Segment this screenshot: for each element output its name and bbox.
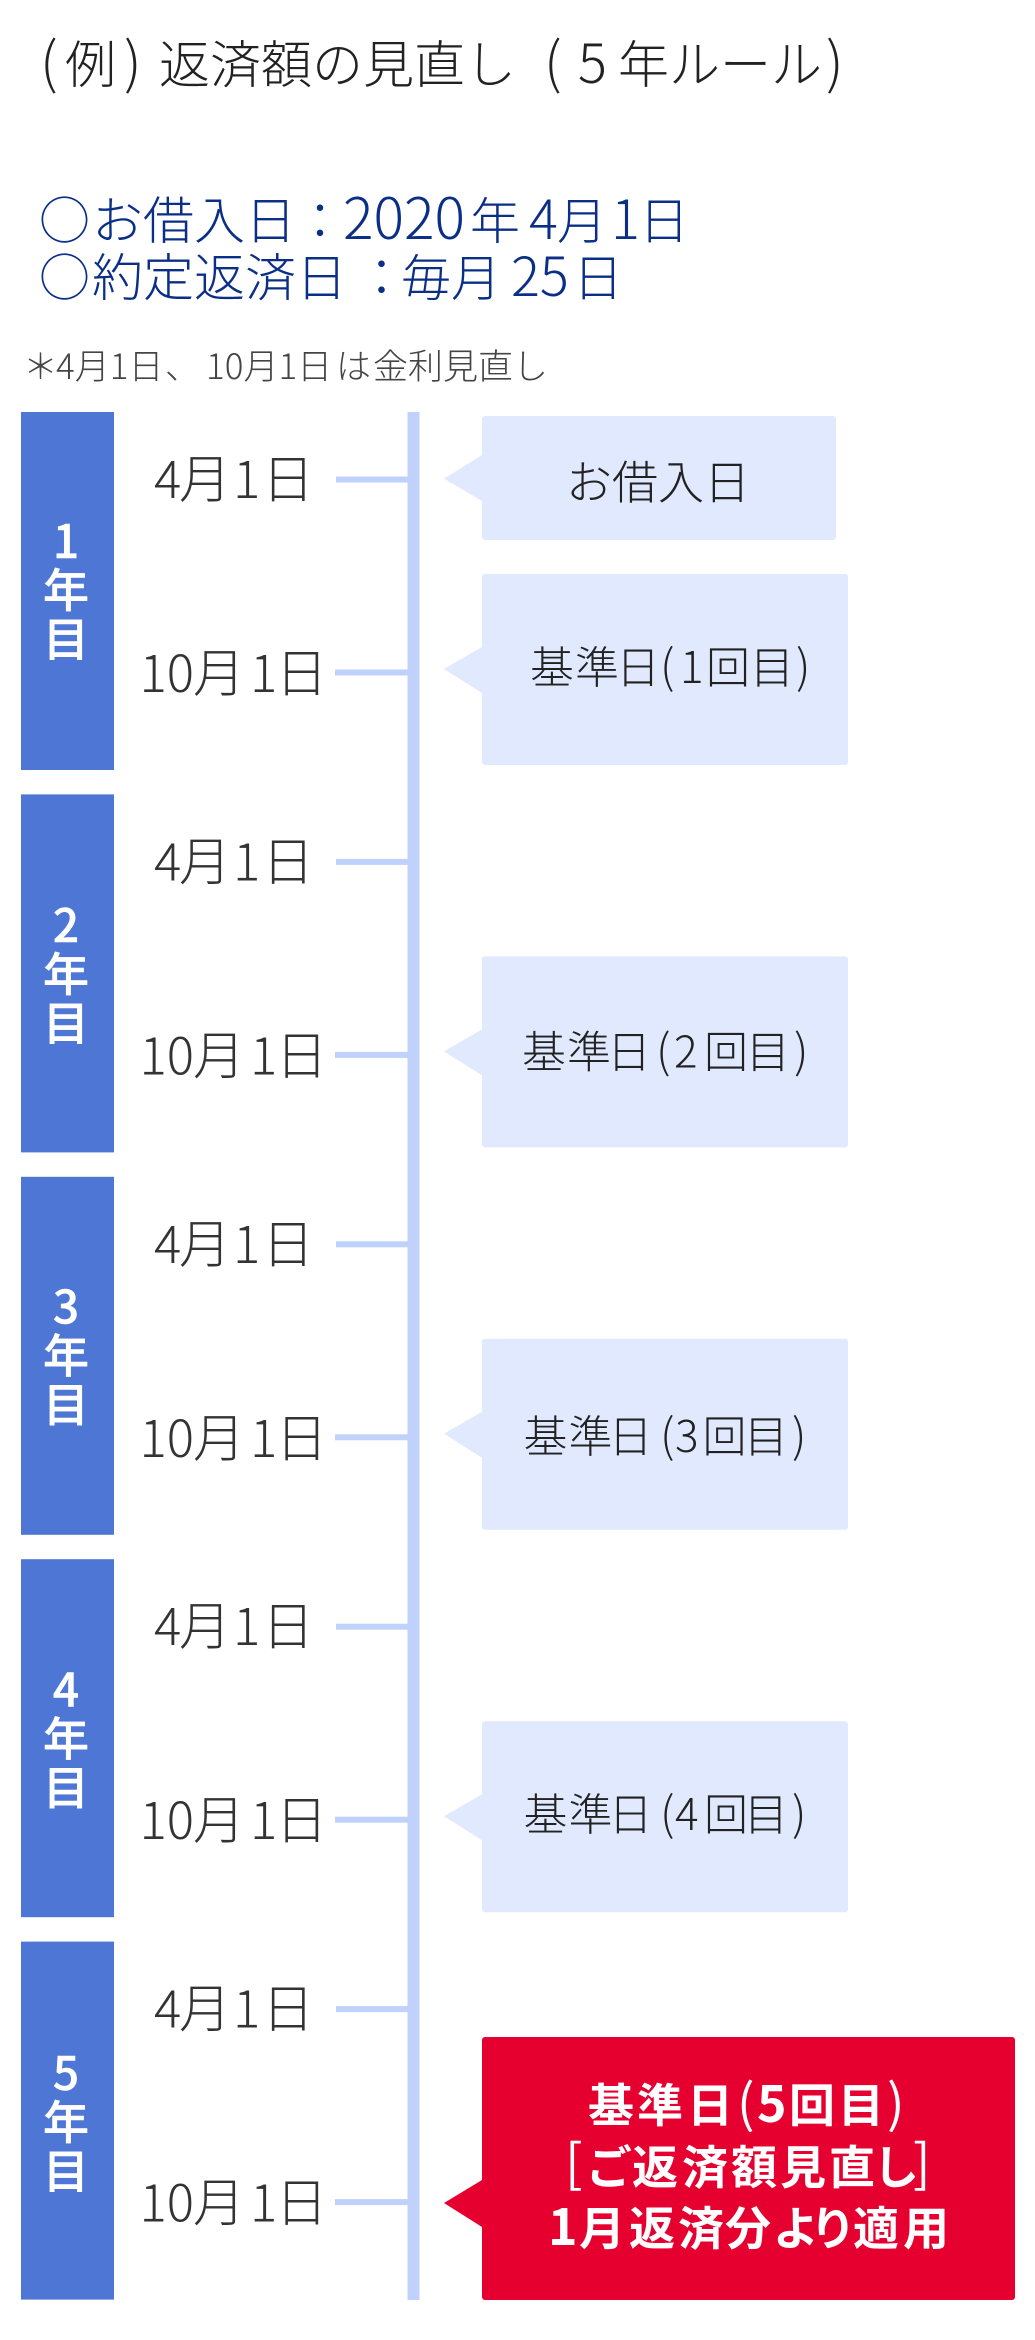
title: 5 bbox=[578, 20, 607, 99]
year 5 October date and tick: 10 bbox=[140, 2163, 194, 2237]
year 1 October date and tick bbox=[140, 632, 408, 707]
year 1 block: 目 bbox=[43, 604, 89, 670]
year 2 October date and tick: 日 bbox=[276, 1014, 328, 1089]
year 2 October date and tick bbox=[140, 1014, 408, 1089]
year 2 April date and tick: 4 bbox=[154, 821, 181, 895]
year 3 block: 3 bbox=[53, 1272, 79, 1338]
year 4 April date and tick bbox=[154, 1585, 408, 1660]
year 3 April date and tick: 月 bbox=[179, 1203, 231, 1278]
year 3 April date and tick: 4 bbox=[154, 1204, 181, 1278]
year 5 April date and tick bbox=[154, 1968, 408, 2043]
year 2 April date and tick: 1 bbox=[233, 821, 260, 895]
year 1 April date and tick: 4 bbox=[154, 439, 181, 513]
year 5 October date and tick: 1 bbox=[250, 2163, 277, 2237]
year 4 April date and tick: 4 bbox=[154, 1586, 181, 1660]
year 2 block: 2 bbox=[53, 890, 79, 956]
callout: reference date 3: 基準日 bbox=[524, 1401, 652, 1465]
year 3 block bbox=[21, 1177, 114, 1535]
year 5 April date and tick: 日 bbox=[262, 1968, 314, 2043]
year 3 April date and tick bbox=[154, 1203, 408, 1278]
note: 4月1日 bbox=[56, 339, 163, 390]
callout: reference date 4: 回目 bbox=[704, 1779, 788, 1843]
note: 、 bbox=[165, 339, 200, 390]
year 2 block: 年 bbox=[43, 939, 89, 1005]
year 3 October date and tick: 10 bbox=[140, 1398, 194, 1472]
year 5 block bbox=[21, 1942, 114, 2300]
year 2 April date and tick: 月 bbox=[179, 820, 231, 895]
year 2 October date and tick: 10 bbox=[140, 1015, 194, 1089]
year 4 block: 4 bbox=[53, 1655, 79, 1721]
year 4 April date and tick: 月 bbox=[179, 1585, 231, 1660]
note: ＊ bbox=[23, 339, 58, 390]
callout: reference date 3: ) bbox=[792, 1400, 806, 1466]
year 4 block: 年 bbox=[43, 1704, 89, 1770]
callout: reference date 5, repayment review: ( bbox=[737, 2062, 755, 2137]
title: 年ルール bbox=[618, 24, 822, 98]
year 4 block: 目 bbox=[43, 1753, 89, 1819]
year 5 April date and tick: 1 bbox=[233, 1969, 260, 2043]
payment date line: 25 bbox=[511, 233, 569, 312]
year 3 October date and tick: 月 bbox=[193, 1397, 245, 1472]
year 1 October date and tick: 10 bbox=[140, 633, 194, 707]
callout: reference date 5, repayment review: [ bbox=[565, 2122, 583, 2197]
title: ) bbox=[826, 19, 844, 100]
year 1 April date and tick: 1 bbox=[233, 439, 260, 513]
callout: reference date 5, repayment review: ) bbox=[887, 2062, 905, 2137]
year 5 block: 目 bbox=[43, 2136, 89, 2202]
title: ) bbox=[124, 19, 142, 100]
callout: reference date 5, repayment review: ] bbox=[913, 2122, 931, 2197]
loan date line: 年 bbox=[470, 182, 520, 254]
loan date line: お借入日 bbox=[92, 180, 296, 254]
payment date line: 日 bbox=[573, 239, 623, 311]
title: 例 bbox=[65, 24, 116, 98]
payment date line: ： bbox=[356, 237, 407, 311]
year 4 block bbox=[21, 1559, 114, 1917]
year 4 October date and tick: 10 bbox=[140, 1780, 194, 1854]
year 3 October date and tick bbox=[140, 1397, 408, 1472]
callout: reference date 3 bbox=[444, 1339, 848, 1530]
loan date line: 月 bbox=[557, 182, 607, 254]
callout: reference date 1: 回目 bbox=[706, 632, 794, 696]
note: 10月1日 bbox=[206, 339, 332, 390]
callout: reference date 4: 4 bbox=[675, 1779, 699, 1843]
year 2 April date and tick: 日 bbox=[262, 820, 314, 895]
year 3 April date and tick: 1 bbox=[233, 1204, 260, 1278]
note: 金利見直し bbox=[373, 339, 548, 390]
year 1 October date and tick: 月 bbox=[193, 632, 245, 707]
year 2 block: 目 bbox=[43, 988, 89, 1054]
year 3 block: 目 bbox=[43, 1370, 89, 1436]
callout: reference date 3: 3 bbox=[675, 1401, 699, 1465]
callout: reference date 4 bbox=[444, 1721, 848, 1912]
year 4 April date and tick: 日 bbox=[262, 1585, 314, 1660]
callout: reference date 2: 回目 bbox=[704, 1016, 790, 1080]
year 4 October date and tick: 月 bbox=[193, 1779, 245, 1854]
callout: reference date 2 bbox=[444, 956, 848, 1147]
callout: reference date 5, repayment review bbox=[444, 2037, 1015, 2300]
callout: reference date 4: 基準日 bbox=[524, 1779, 652, 1843]
callout: reference date 4: ) bbox=[792, 1778, 806, 1844]
callout: reference date 2: ( bbox=[656, 1016, 670, 1082]
callout: loan date bbox=[444, 416, 836, 540]
callout: reference date 5, repayment review: ご返済額見直し bbox=[586, 2132, 919, 2198]
year 5 block: 5 bbox=[53, 2038, 79, 2104]
year 1 October date and tick: 1 bbox=[250, 633, 277, 707]
year 1 block bbox=[21, 412, 114, 770]
loan date line: ○ bbox=[39, 180, 90, 254]
payment date line: ○ bbox=[39, 237, 90, 311]
year 2 October date and tick: 1 bbox=[250, 1015, 277, 1089]
payment date line: 約定返済日 bbox=[92, 237, 347, 311]
year 5 April date and tick: 4 bbox=[154, 1969, 181, 2043]
note: は bbox=[336, 339, 371, 390]
year 3 block: 年 bbox=[43, 1320, 89, 1386]
callout: reference date 5, repayment review: 1 bbox=[548, 2188, 578, 2260]
year 4 October date and tick bbox=[140, 1779, 408, 1854]
year 1 April date and tick bbox=[154, 438, 408, 513]
callout: reference date 1: 1 bbox=[680, 632, 704, 696]
year 2 April date and tick bbox=[154, 820, 408, 895]
callout: reference date 1: ) bbox=[796, 631, 810, 697]
year 1 April date and tick: 日 bbox=[262, 438, 314, 513]
callout: reference date 4: ( bbox=[660, 1778, 674, 1844]
year 3 October date and tick: 日 bbox=[276, 1397, 328, 1472]
year 2 October date and tick: 月 bbox=[193, 1014, 245, 1089]
callout: reference date 2: 2 bbox=[674, 1016, 698, 1080]
title: 返済額の見直し bbox=[159, 24, 516, 98]
year 2 block bbox=[21, 794, 114, 1152]
year 5 October date and tick: 日 bbox=[276, 2162, 328, 2237]
loan date line: 2020 bbox=[343, 174, 465, 256]
callout: reference date 1: 基準日 bbox=[530, 632, 660, 696]
callout: reference date 1: ( bbox=[660, 631, 674, 697]
title: ( bbox=[40, 19, 58, 100]
year 1 October date and tick: 日 bbox=[276, 632, 328, 707]
loan date line: ： bbox=[295, 182, 345, 254]
year 5 April date and tick: 月 bbox=[179, 1968, 231, 2043]
year 5 block: 年 bbox=[43, 2087, 89, 2153]
callout: reference date 2: 基準日 bbox=[522, 1016, 651, 1080]
callout: reference date 5, repayment review: 5 bbox=[757, 2065, 786, 2137]
title: ( bbox=[544, 19, 562, 100]
year 4 April date and tick: 1 bbox=[233, 1586, 260, 1660]
year 4 October date and tick: 日 bbox=[276, 1779, 328, 1854]
year 1 April date and tick: 月 bbox=[179, 438, 231, 513]
callout: reference date 2: ) bbox=[794, 1016, 808, 1082]
callout: reference date 1 bbox=[444, 574, 848, 765]
loan date line: 1 bbox=[611, 176, 640, 255]
year 5 October date and tick bbox=[140, 2162, 408, 2237]
year 4 October date and tick: 1 bbox=[250, 1780, 277, 1854]
payment date line: 毎月 bbox=[401, 239, 501, 311]
callout: reference date 3: 回目 bbox=[702, 1401, 788, 1465]
year 5 October date and tick: 月 bbox=[193, 2162, 245, 2237]
callout: reference date 5, repayment review: 基準日 bbox=[588, 2070, 733, 2136]
loan date line: 4 bbox=[529, 176, 558, 255]
loan date line: 日 bbox=[639, 182, 689, 254]
timeline axis bbox=[408, 412, 420, 2300]
year 1 block: 1 bbox=[53, 506, 79, 572]
callout: reference date 5, repayment review: 回目 bbox=[789, 2070, 884, 2136]
year 3 October date and tick: 1 bbox=[250, 1398, 277, 1472]
callout: loan date: お借入日 bbox=[566, 447, 750, 513]
year 1 block: 年 bbox=[43, 555, 89, 621]
callout: reference date 3: ( bbox=[660, 1400, 674, 1466]
callout: reference date 5, repayment review: 月返済分より適用 bbox=[579, 2193, 949, 2259]
year 3 April date and tick: 日 bbox=[262, 1203, 314, 1278]
